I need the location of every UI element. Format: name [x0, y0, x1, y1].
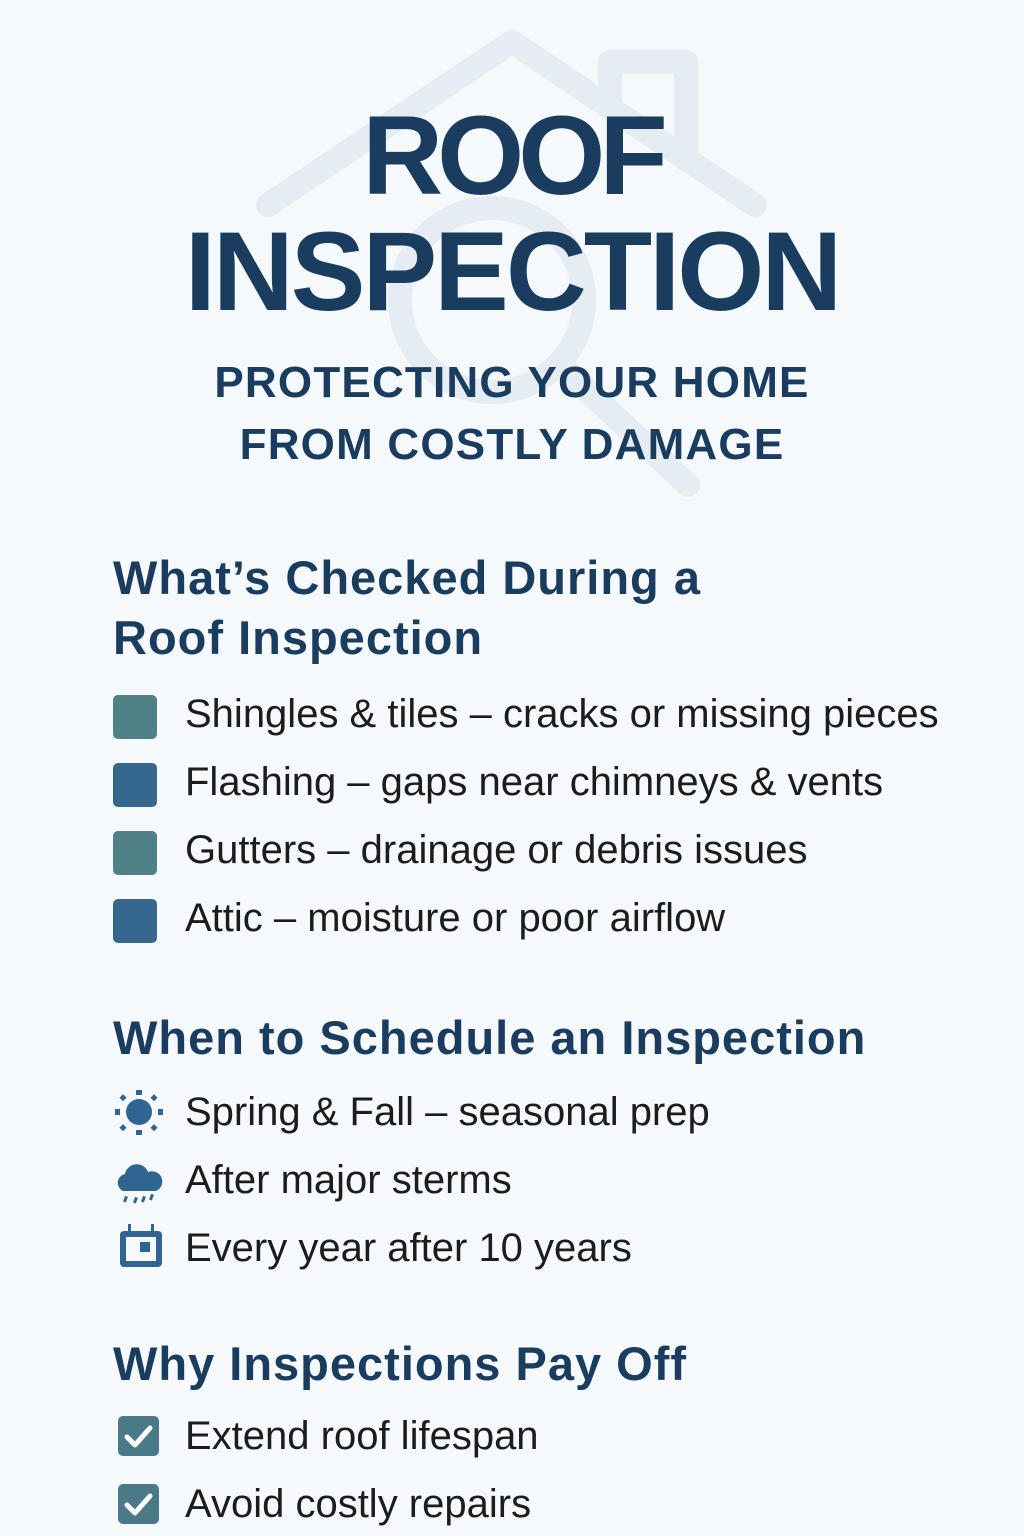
list: benefits: Extend roof lifespan: [185, 1414, 539, 1458]
icon: sun: [115, 1090, 163, 1135]
subtitle: FROM COSTLY DAMAGE: [240, 420, 784, 469]
icon: rain cloud: [118, 1164, 162, 1204]
heading: why inspections pay off: Why Inspections Pay Off: [113, 1337, 687, 1390]
list: checked items: Shingles & tiles – cracks or missing pieces: [185, 692, 939, 736]
background icon: house with magnifier: [256, 30, 767, 497]
list: checked items: Flashing – gaps near chimneys & vents: [185, 760, 883, 804]
list: schedule: Spring & Fall – seasonal prep: [185, 1090, 710, 1134]
list: benefits: [118, 1414, 539, 1526]
subtitle: [214, 358, 810, 469]
list: schedule: [115, 1090, 710, 1270]
list: checked items: [113, 692, 939, 943]
heading: what's checked: What’s Checked During a: [113, 551, 701, 604]
list: checked items: Gutters – drainage or debris issues: [185, 828, 808, 872]
list: checked items: Attic – moisture or poor airflow: [185, 896, 725, 940]
heading: what's checked: [113, 551, 701, 664]
icon: checkbox: [118, 1484, 159, 1524]
title: ROOF: [362, 93, 662, 218]
list: schedule: After major sterms: [185, 1158, 512, 1202]
heading: when to schedule: When to Schedule an Inspection: [113, 1011, 866, 1064]
list: benefits: Avoid costly repairs: [185, 1482, 531, 1526]
icon: checkbox: [118, 1416, 159, 1456]
list: schedule: Every year after 10 years: [185, 1226, 632, 1270]
icon: calendar: [120, 1224, 162, 1267]
text: INSPECTION: [185, 209, 839, 334]
heading: what's checked: Roof Inspection: [113, 611, 483, 664]
subtitle: PROTECTING YOUR HOME: [214, 358, 810, 407]
